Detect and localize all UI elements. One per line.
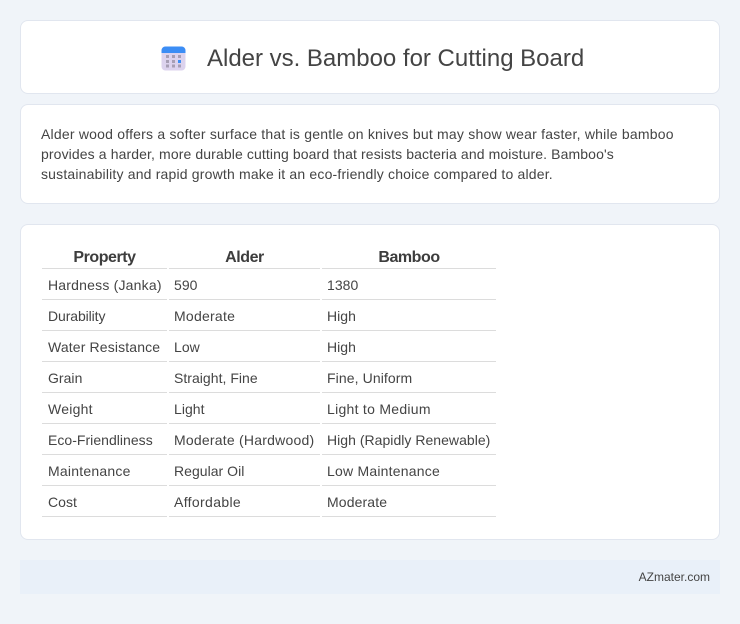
- row: hardness: Hardness (Janka): [48, 277, 162, 293]
- row: maintenance: [48, 463, 440, 479]
- row: durability: Moderate: [174, 308, 235, 324]
- table header: Alder: [225, 249, 264, 266]
- row: maintenance: Low Maintenance: [327, 463, 440, 479]
- row: cost: Affordable: [174, 494, 241, 510]
- row: eco-friendliness: Moderate (Hardwood): [174, 432, 314, 448]
- row: hardness: [48, 277, 358, 293]
- row: durability: Durability: [48, 308, 105, 324]
- row: water resistance: High: [327, 339, 356, 355]
- title: Alder vs. Bamboo for Cutting Board: [207, 45, 584, 72]
- row: durability: [48, 308, 356, 324]
- table header: Property: [73, 249, 136, 266]
- row: grain: [48, 370, 412, 386]
- row: weight: Light to Medium: [327, 401, 431, 417]
- row: cost: Cost: [48, 494, 77, 510]
- row: cost: Moderate: [327, 494, 387, 510]
- panel: comparison table card: [20, 224, 720, 540]
- row: weight: Weight: [48, 401, 93, 417]
- row: maintenance: Maintenance: [48, 463, 131, 479]
- row: grain: Straight, Fine: [174, 370, 258, 386]
- footer text: AZmater.com: [639, 570, 710, 584]
- row: maintenance: Regular Oil: [174, 463, 244, 479]
- row: durability: High: [327, 308, 356, 324]
- row: weight: Light: [174, 401, 205, 417]
- row: eco-friendliness: High (Rapidly Renewable): [327, 432, 490, 448]
- row: grain: Grain: [48, 370, 82, 386]
- row: eco-friendliness: [48, 432, 490, 448]
- row: eco-friendliness: Eco-Friendliness: [48, 432, 153, 448]
- row: hardness: 590: [174, 277, 197, 293]
- row: water resistance: [48, 339, 356, 355]
- row: water resistance: Water Resistance: [48, 339, 160, 355]
- text block: description: provides a harder, more durable cutting board that resists bacteria and moisture. Bamboo's: [41, 146, 614, 162]
- table: property comparison: [42, 249, 496, 517]
- table header: Bamboo: [378, 249, 440, 266]
- row: hardness: 1380: [327, 277, 358, 293]
- text block: description: sustainability and rapid growth make it an eco-friendly choice compared to alder.: [41, 166, 553, 182]
- row: water resistance: Low: [174, 339, 200, 355]
- footer bar: [20, 560, 720, 594]
- row: cost: [48, 494, 387, 510]
- panel: title card: [20, 20, 720, 94]
- text block: description: [41, 126, 674, 182]
- table header: [73, 249, 440, 266]
- row: grain: Fine, Uniform: [327, 370, 412, 386]
- icon: calendar: [162, 46, 186, 70]
- text block: description: Alder wood offers a softer surface that is gentle on knives but may show wear faster, while bamboo: [41, 126, 674, 142]
- row: weight: [48, 401, 431, 417]
- panel: description card: [20, 104, 720, 204]
